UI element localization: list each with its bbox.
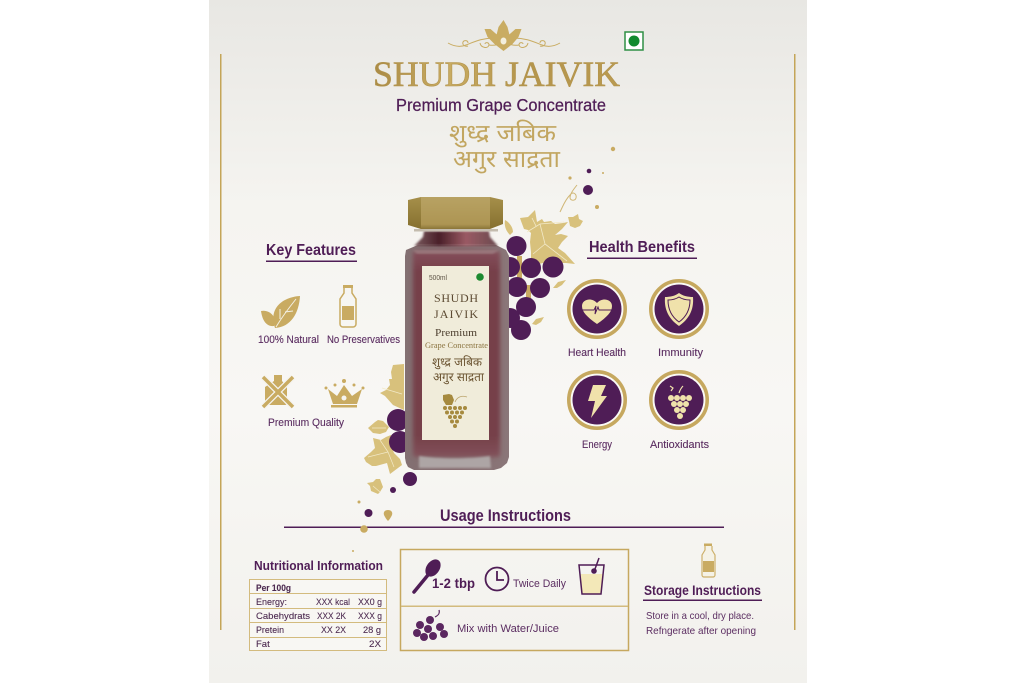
title: SHUDH JAIVIK — [373, 54, 620, 94]
icon: top ornament — [448, 20, 560, 51]
icon: clock — [486, 568, 508, 590]
icon: glass — [579, 558, 604, 594]
bottle label: JAIVIK — [434, 307, 478, 321]
panel: storage instructions: Refngerate after opening — [646, 625, 756, 637]
nutrition table — [250, 580, 387, 650]
heading: key features: Key Features — [266, 242, 356, 259]
bottle label: Premium — [435, 327, 477, 339]
bottle label — [422, 266, 489, 440]
panel: storage instructions — [643, 544, 762, 637]
bottle label: अगुर साद्रता — [433, 370, 485, 385]
bottle cap — [408, 197, 503, 232]
label: no preservatives: No Preservatives — [327, 334, 400, 346]
nutrition table: 2X — [369, 639, 382, 650]
icon: leaf — [261, 296, 300, 328]
usage divider — [284, 526, 724, 528]
hindi title — [449, 119, 561, 174]
grape cluster upper right — [500, 210, 583, 340]
icon: shield — [651, 281, 707, 337]
bottle — [405, 197, 509, 470]
icon: heart — [569, 281, 625, 337]
text: twice daily: Twice Daily — [513, 578, 566, 590]
decorative gold dot on divider — [360, 525, 368, 533]
text: mix: Mix with Water/Juice — [457, 623, 559, 635]
nutrition table: XX 2X — [321, 625, 347, 636]
panel: health benefits — [568, 239, 709, 451]
bottle label: SHUDH — [434, 291, 478, 305]
heading: storage: Storage Instructions — [644, 583, 761, 598]
hindi title: अगुर साद्रता — [453, 146, 561, 174]
heading: nutritional information: Nutritional Information — [254, 558, 383, 573]
right border line — [794, 54, 796, 630]
panel: nutritional information — [250, 558, 387, 650]
text: storage: Store in a cool, dry place. — [646, 610, 754, 622]
icon: crossed bottle — [263, 375, 293, 407]
panel: usage box — [400, 550, 628, 650]
text: dose: 1-2 tbp — [432, 575, 475, 591]
subtitle: Premium Grape Concentrate — [396, 95, 606, 115]
icon: grapes — [651, 372, 707, 428]
nutrition table: Per 100g — [256, 583, 291, 594]
nutrition table: XXX 2K — [317, 611, 347, 622]
label: immunity: Immunity — [658, 347, 703, 359]
heading: usage instructions: Usage Instructions — [440, 506, 571, 525]
bottle body — [405, 245, 509, 470]
bottle inner liquid — [413, 251, 500, 457]
label: antioxidants: Antioxidants — [650, 439, 709, 451]
icon: grapes — [413, 610, 448, 641]
icon: lightning — [569, 372, 625, 428]
nutrition table: 28 g — [363, 625, 381, 636]
nutrition table: Fat — [256, 639, 270, 650]
bottle label: 500ml — [429, 275, 447, 282]
icon: crown — [324, 379, 364, 408]
label: heart health: Heart Health — [568, 347, 626, 359]
bottle bottom frost — [419, 456, 491, 468]
bottle label: Grape Concentrate — [425, 340, 488, 350]
icon: storage bottle — [702, 544, 715, 577]
grape cluster lower left — [352, 364, 417, 552]
decorative dots top — [560, 147, 615, 212]
icon: spoon — [414, 556, 444, 592]
left border line — [220, 54, 222, 630]
nutrition table: Cabehydrats — [256, 611, 310, 622]
icon: vegetarian mark — [625, 32, 643, 50]
label: energy: Energy — [582, 439, 612, 451]
nutrition table: Energy: — [256, 597, 287, 608]
label: premium quality: Premium Quality — [268, 417, 344, 429]
nutrition table: XX0 g — [358, 597, 382, 608]
panel: key features — [258, 242, 400, 429]
hindi title: शुध्द्र जबिक — [449, 119, 557, 148]
bottle neck — [414, 231, 498, 246]
label: 100% natural: 100% Natural — [258, 334, 319, 346]
nutrition table: XXX g — [358, 611, 382, 622]
icon: label grapes — [443, 394, 467, 428]
icon: bottle — [340, 285, 356, 327]
heading: health benefits: Health Benefits — [589, 239, 695, 256]
background panel — [209, 0, 807, 683]
bottle label: शुध्द्र जबिक — [432, 355, 483, 370]
nutrition table: XXX kcal — [316, 597, 350, 608]
nutrition table: Pretein — [256, 625, 284, 636]
